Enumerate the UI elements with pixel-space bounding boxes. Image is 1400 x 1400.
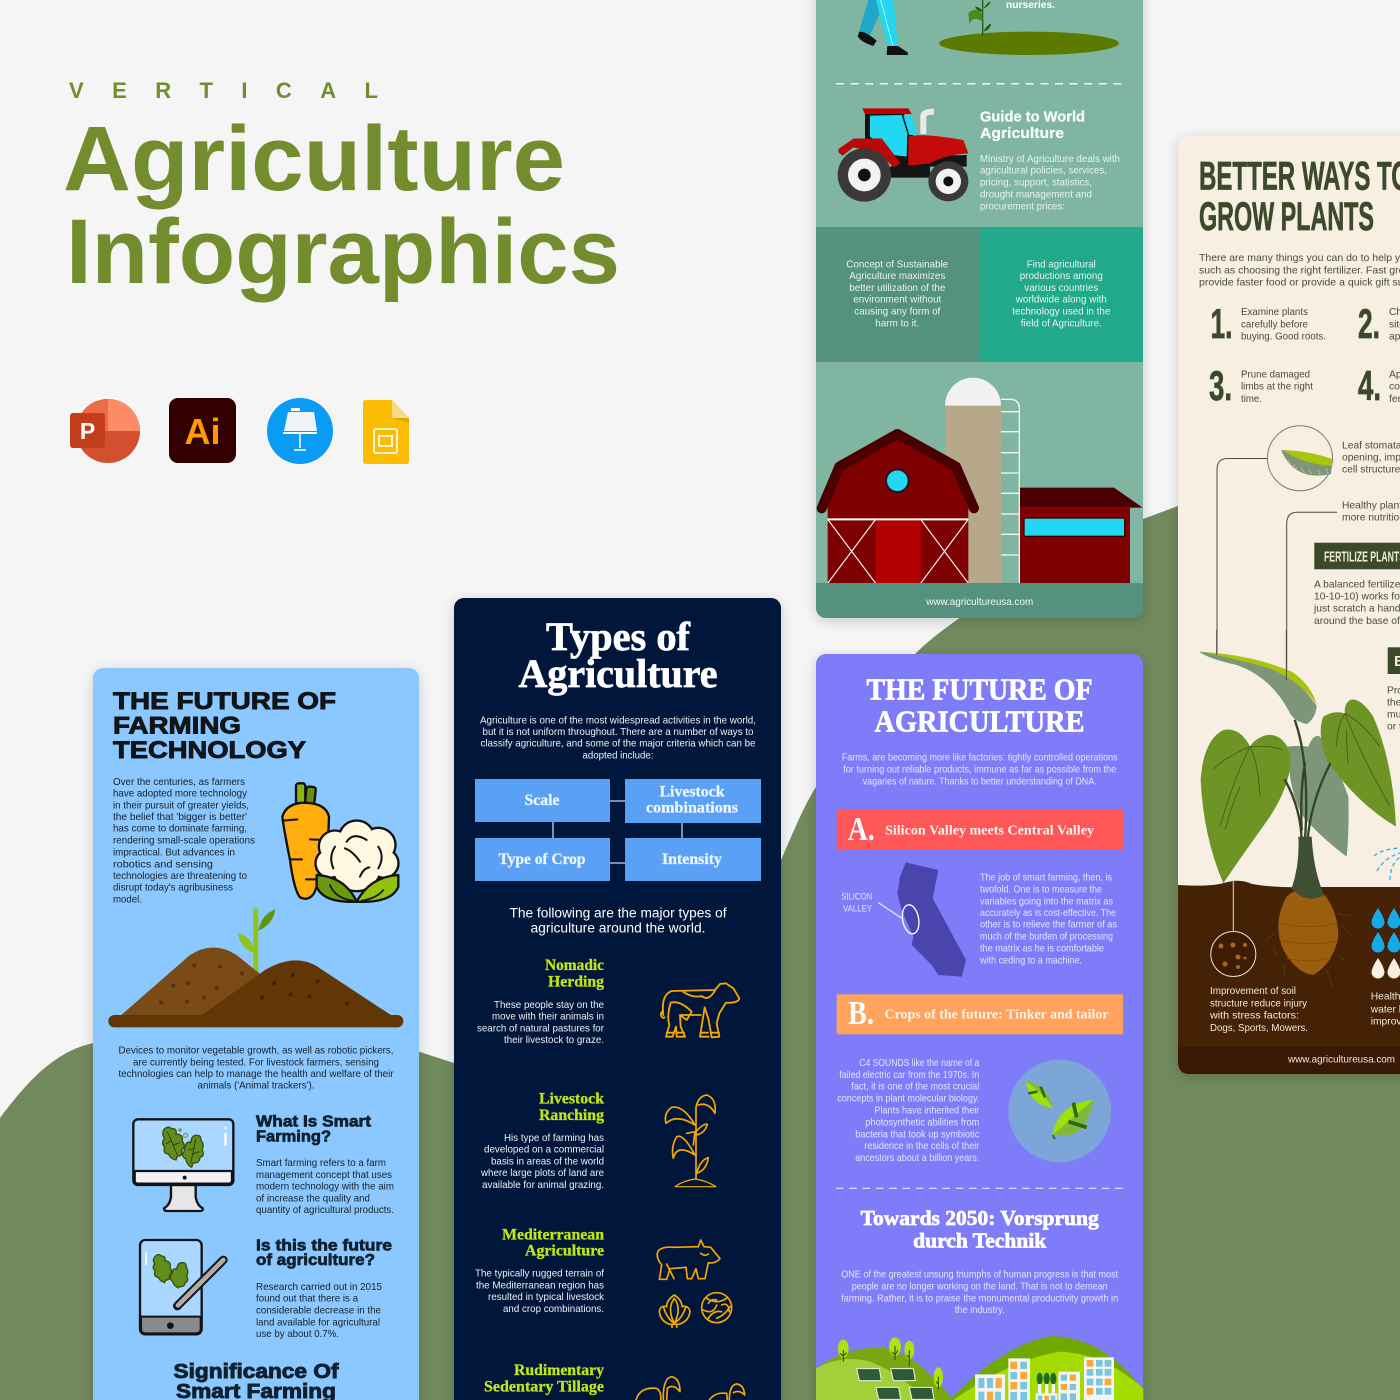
- section: rudimentary sedentary tillage: Sedentary Tillage: [484, 1379, 604, 1396]
- text block: smart farming job: variables going into the matrix as: [980, 896, 1113, 907]
- text block: progress: [841, 1270, 1118, 1316]
- text block: progress: farming. Rather, it is to praise the monumental productivity growth in: [841, 1293, 1118, 1304]
- text block: agriculture intro: classify agriculture, and some of the major criteria which can be: [480, 739, 756, 750]
- heading: towards 2050: durch Technik: [913, 1229, 1047, 1253]
- soil quality callout: with stress factors:: [1209, 1010, 1299, 1021]
- section: nomadic herding: Herding: [548, 974, 604, 991]
- icon: sprinkler spray: [1374, 848, 1400, 880]
- title block: [63, 78, 620, 303]
- heading: types of agriculture: [518, 614, 718, 696]
- footer: website: www.agricultureusa.com: [1287, 1055, 1395, 1066]
- soil quality callout: Dogs, Sports, Mowers.: [1210, 1023, 1308, 1034]
- section: mediterranean agriculture: Mediterranean: [502, 1226, 604, 1243]
- text block: is this the future: Research carried out in 2015: [256, 1282, 382, 1293]
- heading: farming technology: FARMING: [113, 712, 241, 740]
- icon: powerpoint: [70, 399, 140, 463]
- illustration: soil ground: [1178, 881, 1400, 1047]
- heading: agriculture infographics: Infographics: [66, 201, 620, 303]
- diagram: classification criteria boxes: Intensity: [662, 851, 722, 868]
- text block: intro: Over the centuries, as farmers: [113, 777, 245, 788]
- icon: illustrator: [169, 398, 236, 463]
- list: numbered tips: limbs at the right: [1241, 382, 1313, 393]
- text block: following major types: [510, 905, 727, 936]
- text block: C4: Plants have inherited their: [874, 1105, 980, 1116]
- text block: C4: failed electric car from the 1970s. In: [839, 1070, 980, 1081]
- leaf stomata callout: [1217, 426, 1400, 654]
- section: mediterranean agriculture: the Mediterranean region has: [476, 1280, 604, 1291]
- heading: agriculture infographics: Agriculture: [63, 108, 565, 210]
- text block: smart farming job: The job of smart farming, then, is: [980, 873, 1112, 884]
- text block: agriculture intro: Agriculture is one of the most widespread activities in the world,: [480, 715, 756, 726]
- map: california: VALLEY: [843, 903, 872, 913]
- panel: sustainable agriculture concept: environment without: [853, 295, 941, 306]
- icon: corn plant: [665, 1095, 716, 1187]
- text block: intro: have adopted more technology: [113, 789, 248, 800]
- illustration: farmer legs and plant: [858, 0, 1119, 55]
- diagram: classification criteria boxes: Type of Crop: [498, 851, 586, 868]
- panel: future of farming technology (blue): [93, 668, 419, 1400]
- green hill background: [0, 470, 1400, 1400]
- text block: healthy water: [1370, 991, 1400, 1027]
- panel: types of agriculture (navy): [454, 598, 781, 1400]
- list: numbered tips: carefully before: [1241, 319, 1308, 330]
- section: rudimentary sedentary tillage: Rudimentary: [514, 1362, 604, 1379]
- heading: better ways to grow plants: [1200, 161, 1400, 231]
- text block: plants intro: [1199, 253, 1400, 289]
- text block: C4: photosynthetic abilities from: [865, 1117, 979, 1128]
- section: livestock ranching: available for animal grazing.: [482, 1180, 604, 1191]
- text block: C4: residence in the cells of their: [864, 1141, 980, 1152]
- icon: cow outline: [661, 983, 739, 1037]
- text block: guide to world agriculture: pricing, support, statistics,: [980, 178, 1092, 189]
- text block: is this the future: Is this the future: [256, 1238, 392, 1255]
- diagram: classification criteria boxes: combinations: [646, 800, 738, 817]
- heading: future of agriculture: [866, 671, 1092, 739]
- section: nomadic herding: Nomadic: [545, 957, 604, 974]
- text block: intro: rendering small-scale operations: [113, 836, 255, 847]
- list: numbered tips: 3.: [1209, 362, 1232, 409]
- text block: following major types: agriculture around the world.: [530, 921, 706, 936]
- icon: carrot and cauliflower: [282, 783, 398, 902]
- text block: intro: impractical. But advances in: [113, 848, 235, 859]
- section: livestock ranching: Ranching: [539, 1107, 604, 1124]
- panel: sustainable agriculture concept: harm to it.: [875, 318, 919, 329]
- section: mediterranean agriculture: and crop combinations.: [503, 1304, 604, 1315]
- text block: intro: in their pursuit of greater yields,: [113, 800, 249, 811]
- list: numbered tips: Prune damaged: [1241, 369, 1310, 380]
- text block: what is smart farming: Farming?: [256, 1129, 331, 1146]
- text block: intro: has come to dominate farming,: [113, 824, 247, 835]
- text block: farms intro: for turning out reliable products, immune as far as possible from the: [843, 764, 1116, 775]
- icon: keynote: [267, 398, 333, 464]
- heading: towards 2050: [861, 1206, 1099, 1253]
- text block: what is smart farming: [256, 1114, 394, 1216]
- text block: smart farming job: [979, 873, 1117, 966]
- banner B: crops of the future: B.: [848, 995, 874, 1032]
- list: numbered tips: Examine plants: [1241, 307, 1308, 318]
- panel: sustainable agriculture concept: causing any form of: [854, 307, 940, 318]
- heading: farming technology: THE FUTURE OF: [113, 688, 336, 715]
- panel: sustainable agriculture concept: Concept of Sustainable: [846, 259, 949, 270]
- text block: agriculture intro: adopted include:: [582, 750, 654, 761]
- soil quality callout: Improvement of soil: [1210, 986, 1296, 997]
- section: mediterranean agriculture: [475, 1226, 605, 1315]
- section: nomadic herding: [477, 957, 605, 1046]
- footer: website: www.agricultureusa.com: [925, 597, 1033, 608]
- text block: intro: model.: [113, 894, 142, 905]
- section: rudimentary sedentary tillage: [484, 1362, 604, 1396]
- footer: website: [1178, 1047, 1400, 1074]
- text block: C4: ancestors about a billion years.: [855, 1153, 979, 1164]
- text block: intro: the belief that 'bigger is better': [113, 812, 247, 823]
- icon: ox, artichoke and cabbage: [657, 1240, 732, 1327]
- map: california: SILICON: [841, 891, 872, 901]
- section: livestock ranching: where large plots of land are: [480, 1168, 604, 1179]
- text block: devices: technologies can help to manage the health and welfare of their: [118, 1069, 394, 1080]
- panel: agricultural productions: field of Agriculture.: [1021, 318, 1102, 329]
- text block: guide to world agriculture: Agriculture: [980, 125, 1064, 142]
- icon: crop sprouts: [636, 1377, 745, 1400]
- panel: guide to world agriculture (teal): [816, 0, 1143, 618]
- icon: illustrator: Ai: [184, 411, 220, 452]
- heading: significance of smart farming: [174, 1361, 339, 1400]
- text block: guide to world agriculture: [980, 109, 1120, 212]
- text block: what is smart farming: of increase the quality and: [256, 1193, 370, 1204]
- list: numbered tips: buying. Good roots.: [1241, 332, 1326, 343]
- banner B: crops of the future: [837, 994, 1123, 1034]
- panel: agricultural productions: [980, 227, 1143, 362]
- list: numbered tips: time.: [1241, 394, 1262, 405]
- text block: guide to world agriculture: Ministry of Agriculture deals with: [980, 154, 1120, 165]
- text block: what is smart farming: What Is Smart: [256, 1114, 372, 1131]
- text block: is this the future: of agriculture?: [256, 1252, 375, 1269]
- section: fertilize plants: [1313, 543, 1400, 627]
- text block: devices: are currently being tested. For livestock farmers, sensing: [133, 1057, 379, 1068]
- text block: what is smart farming: modern technology with the aim: [256, 1182, 394, 1193]
- list: numbered tips: 4.: [1358, 362, 1381, 409]
- text block: C4: C4 SOUNDS like the name of a: [859, 1058, 980, 1069]
- illustration: large plant with tuber: [1199, 630, 1396, 987]
- icon: leaves in circle: [1008, 1060, 1111, 1162]
- text block: devices: Devices to monitor vegetable growth, as well as robotic pickers,: [118, 1045, 394, 1056]
- icon: water drops: [1372, 908, 1400, 979]
- text block: smart farming job: the matrix as he is comfortable: [980, 943, 1104, 954]
- illustration: green hills with solar panels and city: [816, 1336, 1143, 1400]
- text block: intro: robotics and sensing: [113, 859, 213, 870]
- soil quality callout: [1209, 881, 1308, 1034]
- soil quality callout: structure reduce injury: [1210, 998, 1308, 1009]
- text block: is this the future: considerable decrease in the: [256, 1305, 381, 1316]
- panel: better ways to grow plants (cream): [1178, 136, 1400, 1074]
- heading: types of agriculture: Types of: [546, 614, 691, 659]
- text: nurseries: nurseries.: [1006, 0, 1055, 11]
- text block: farms intro: Farms, are becoming more like factories: tightly controlled operations: [842, 753, 1118, 764]
- text block: agriculture intro: [480, 715, 756, 761]
- text block: progress: the industry.: [955, 1305, 1005, 1316]
- icon: tablet with stylus: [140, 1240, 223, 1334]
- heading: agriculture infographics: [63, 108, 620, 303]
- heading: farming technology: TECHNOLOGY: [113, 737, 306, 764]
- list: numbered tips: 2.: [1358, 300, 1380, 347]
- text block: is this the future: [256, 1238, 392, 1340]
- section: nomadic herding: move with their animals in: [492, 1012, 604, 1023]
- text block: progress: people are no longer working on the land. That is not to demean: [852, 1281, 1108, 1292]
- section: second tip box: [1387, 647, 1400, 733]
- banner B: crops of the future: Crops of the future: Tinker and tailor: [884, 1007, 1108, 1022]
- illustration: barn, silo and shed: [822, 378, 1143, 583]
- section: livestock ranching: basis in areas of the world: [491, 1156, 604, 1167]
- eyebrow: vertical: VERTICAL: [69, 78, 378, 103]
- text block: guide to world agriculture: drought management and: [980, 189, 1092, 200]
- panel: agricultural productions: productions among: [1020, 271, 1103, 282]
- heading: future of agriculture: THE FUTURE OF: [866, 671, 1092, 706]
- heading: future of agriculture: AGRICULTURE: [874, 704, 1084, 739]
- text block: intro: disrupt today's agribusiness: [113, 883, 233, 894]
- footer: website: [816, 583, 1143, 618]
- text block: devices: animals ('Animal trackers').: [198, 1081, 314, 1092]
- text block: smart farming job: twofold. One is to measure the: [980, 884, 1102, 895]
- text block: progress: ONE of the greatest unsung triumphs of human progress is that most: [841, 1270, 1118, 1281]
- text block: is this the future: land available for agricultural: [256, 1317, 380, 1328]
- healthy plants callout: [1287, 500, 1400, 680]
- text block: smart farming job: with ceding to a machine.: [979, 955, 1082, 966]
- text block: intro: technologies are threatening to: [113, 871, 247, 882]
- icon: google slides: [363, 400, 409, 464]
- text block: smart farming job: much of the burden of processing: [980, 932, 1113, 943]
- section: livestock ranching: His type of farming has: [504, 1133, 604, 1144]
- text block: smart farming job: accurately as is cost-effective. The: [980, 908, 1116, 919]
- diagram: classification criteria boxes: Livestock: [660, 784, 725, 801]
- text block: following major types: The following are the major types of: [510, 905, 727, 920]
- panel: agricultural productions: Find agricultural: [1027, 259, 1096, 270]
- section: nomadic herding: their livestock to graze.: [504, 1035, 604, 1046]
- section: mediterranean agriculture: The typically rugged terrain of: [475, 1269, 604, 1280]
- banner A: silicon valley: A.: [848, 811, 875, 848]
- section: mediterranean agriculture: resulted in typical livestock: [488, 1292, 605, 1303]
- diagram: classification criteria boxes: [475, 779, 761, 881]
- text block: intro: [113, 777, 255, 905]
- text block: guide to world agriculture: agricultural policies, services,: [980, 166, 1107, 177]
- banner A: silicon valley: [837, 810, 1123, 850]
- icon: soil mounds with sprout: [108, 908, 403, 1027]
- text block: guide to world agriculture: procurement prices:: [980, 201, 1065, 212]
- icon: powerpoint: P: [80, 418, 95, 444]
- text block: devices: [118, 1045, 394, 1092]
- banner A: silicon valley: Silicon Valley meets Central Valley: [885, 823, 1094, 838]
- diagram: classification criteria boxes: Scale: [524, 792, 560, 809]
- section: livestock ranching: [480, 1090, 604, 1191]
- heading: towards 2050: Towards 2050: Vorsprung: [861, 1206, 1099, 1230]
- panel: agricultural productions: worldwide along with: [1015, 295, 1107, 306]
- section: nomadic herding: search of natural pastures for: [477, 1023, 605, 1034]
- panel: agricultural productions: technology used in the: [1012, 307, 1111, 318]
- text block: C4: fact, it is one of the most crucial: [851, 1082, 979, 1093]
- panel: sustainable agriculture concept: Agriculture maximizes: [849, 271, 945, 282]
- section: livestock ranching: Livestock: [539, 1090, 604, 1107]
- text block: C4: bacteria that took up symbiotic: [855, 1129, 979, 1140]
- text block: smart farming job: other is to relieve the farmer of as: [980, 920, 1117, 931]
- section: mediterranean agriculture: Agriculture: [525, 1243, 604, 1260]
- text block: C4: concepts in plant molecular biology.: [837, 1094, 979, 1105]
- list: numbered tips: 1.: [1210, 300, 1232, 347]
- text block: guide to world agriculture: Guide to World: [980, 109, 1085, 126]
- panel: agricultural productions: various countries: [1024, 283, 1098, 294]
- section: livestock ranching: developed on a commercial: [484, 1145, 604, 1156]
- text block: C4: [837, 1058, 980, 1164]
- heading: farming technology: [113, 688, 336, 764]
- text block: farms intro: vagaries of nature. Thanks to better understanding of DNA.: [863, 776, 1097, 787]
- text block: farms intro: [842, 753, 1118, 787]
- panel: sustainable agriculture concept: [816, 227, 980, 362]
- text block: is this the future: use by about 0.7%.: [256, 1329, 339, 1340]
- map: california: [841, 862, 966, 977]
- list: numbered tips: [1209, 308, 1400, 402]
- text block: what is smart farming: quantity of agricultural products.: [256, 1205, 394, 1216]
- text block: agriculture intro: but it is not uniform throughout. There are a number of ways to: [482, 727, 754, 738]
- icon: red tractor: [838, 108, 968, 202]
- section: nomadic herding: These people stay on the: [494, 1000, 604, 1011]
- text block: is this the future: found out that there is a: [256, 1294, 358, 1305]
- panel: sustainable agriculture concept: better utilization of the: [849, 283, 946, 294]
- heading: significance of smart farming: Significance Of: [174, 1361, 339, 1383]
- panel: future of agriculture (purple): [816, 654, 1143, 1400]
- text block: what is smart farming: management concept that uses: [256, 1170, 392, 1181]
- icon: desktop monitor with leaves: [133, 1119, 233, 1211]
- heading: types of agriculture: Agriculture: [518, 651, 718, 696]
- text block: what is smart farming: Smart farming refers to a farm: [256, 1158, 386, 1169]
- software icons row: [70, 398, 409, 464]
